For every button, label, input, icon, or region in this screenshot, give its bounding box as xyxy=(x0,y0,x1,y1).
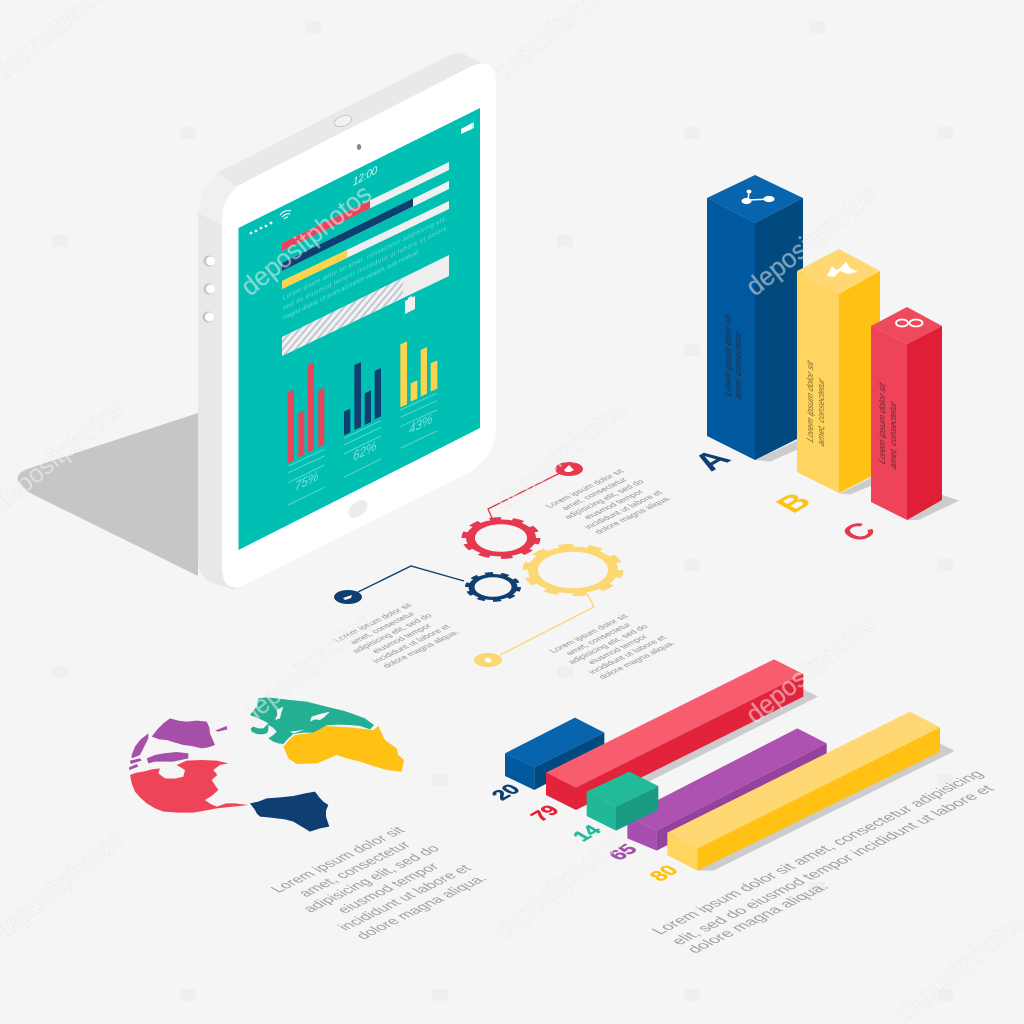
screen paragraph: Lorem ipsum dolor sit amet, consectetur adipisicing elit, xyxy=(283,215,447,302)
gear text: top right: eiusmod tempor xyxy=(581,488,646,520)
red chart xyxy=(288,362,324,463)
icon: network xyxy=(742,190,774,204)
column shadows xyxy=(755,439,959,520)
gear text: left: eiusmod tempor xyxy=(369,622,434,654)
wifi icon xyxy=(280,210,291,219)
column B text xyxy=(805,358,826,448)
clock: 12:00 xyxy=(353,164,378,189)
watermarks: depositphotos xyxy=(491,395,632,517)
gear text: top right: dolore magna aliqua. xyxy=(592,495,674,535)
bar chart text: elit, sed do eiusmod tempor incididunt ut labore et xyxy=(668,783,999,947)
chart percentages: 62% xyxy=(353,438,376,464)
watermarks: depositphotos xyxy=(236,180,377,302)
bar shadows xyxy=(627,689,955,871)
icon: gears xyxy=(896,320,922,326)
loading bar xyxy=(282,255,449,356)
tablet left edge xyxy=(198,213,236,590)
gear text: bottom right: incididunt ut labore et xyxy=(586,634,669,675)
chart percentages: 43% xyxy=(409,411,432,437)
map text: incididunt ut labore et xyxy=(335,863,476,933)
label A: A xyxy=(685,445,739,476)
gear text: bottom right: dolore magna aliqua. xyxy=(596,640,678,680)
column chart xyxy=(685,175,959,546)
yellow chart xyxy=(400,341,437,407)
yellow gear xyxy=(526,546,620,594)
gear text: bottom right: eiusmod tempor xyxy=(585,633,650,665)
progress bars xyxy=(282,162,449,289)
screen paragraph: magna aliqua. Ut enim ad minim veniam, quis nostrud xyxy=(283,249,418,322)
column A text xyxy=(723,312,743,401)
map text: eiusmod tempor xyxy=(334,861,443,916)
home button xyxy=(345,497,371,521)
gear text: bottom right: Lorem ipsum dolor sit xyxy=(547,613,631,654)
horizontal bar chart xyxy=(487,659,955,884)
gear text: top right: Lorem ipsum dolor sit xyxy=(543,468,627,509)
yellow node xyxy=(474,653,502,667)
bar: 20 xyxy=(505,718,604,790)
value 79: 79 xyxy=(526,802,565,824)
status bar dots xyxy=(250,222,272,234)
column B text: amet, consectetur xyxy=(816,375,826,448)
map: Europe Asia xyxy=(250,697,374,744)
map: Europe Asia gaps xyxy=(275,707,330,733)
map text: adipisicing elit, sed do xyxy=(300,843,444,915)
watermarks: depositphotos xyxy=(741,180,882,302)
column B text: Lorem ipsum dolor sit xyxy=(805,358,815,444)
value 65: 65 xyxy=(604,841,643,863)
map text: Lorem ipsum dolor sit xyxy=(268,825,410,895)
column C text xyxy=(877,380,898,471)
battery icon xyxy=(461,122,474,134)
gear text: left: incididunt ut labore et xyxy=(370,623,453,664)
yellow connector xyxy=(500,595,594,655)
value 14: 14 xyxy=(568,822,607,844)
tablet shadow xyxy=(18,413,198,576)
screen paragraph: sed do eiusmod tempor incididunt ut labore et dolore xyxy=(283,225,447,312)
gear text: left: adipisicing elit, sed do xyxy=(349,612,434,654)
tablet front face xyxy=(222,63,496,587)
map: Africa xyxy=(283,726,404,772)
gear text: bottom right: adipisicing elit, sed do xyxy=(565,623,650,665)
chart caption lines xyxy=(288,393,437,505)
screen bar charts xyxy=(288,341,437,505)
watermarks: depositphotos xyxy=(236,608,377,730)
chart percentages: 75% xyxy=(295,468,318,494)
gear text: left: Lorem ipsum dolor sit xyxy=(331,602,415,643)
tablet top edge xyxy=(217,54,492,186)
map: South America xyxy=(250,792,329,832)
gear text: top right: adipisicing elit, sed do xyxy=(561,478,646,520)
chart percentages xyxy=(295,411,432,494)
navy chart xyxy=(344,362,381,435)
red gear xyxy=(465,519,537,557)
watermarks: depositphotos xyxy=(489,825,630,947)
gear text: top right: amet, consectetur xyxy=(559,476,630,511)
world map xyxy=(129,697,404,832)
gear text: left: dolore magna aliqua. xyxy=(380,629,462,669)
camera xyxy=(357,144,361,150)
label C: C xyxy=(833,517,884,546)
column C xyxy=(871,307,942,520)
column A text: Lorem ipsum dolor sit xyxy=(723,312,733,398)
value 20: 20 xyxy=(487,781,526,803)
map: Arctic xyxy=(129,718,227,770)
red node xyxy=(555,462,583,476)
bar: 80 xyxy=(667,712,940,871)
tablet bevel corner xyxy=(198,173,235,225)
bar: 79 xyxy=(546,659,803,810)
tablet side buttons xyxy=(202,256,215,322)
column B xyxy=(797,249,880,493)
tablet top button xyxy=(333,113,353,129)
column C text: amet, consectetur xyxy=(888,398,898,471)
icon: people xyxy=(827,262,858,277)
bar chart text: dolore magna aliqua. xyxy=(684,881,833,956)
screen xyxy=(238,108,480,550)
navy connector xyxy=(358,566,464,592)
bar: 14 xyxy=(587,772,658,831)
gear text: bottom right: amet, consectetur xyxy=(563,621,634,656)
clipboard icon xyxy=(405,296,415,314)
navy node xyxy=(334,590,362,604)
gear text: left: amet, consectetur xyxy=(347,610,418,645)
map text: amet, consectetur xyxy=(295,840,415,899)
column C text: Lorem ipsum dolor sit xyxy=(877,380,887,466)
column A xyxy=(707,175,803,460)
bar chart text: Lorem ipsum dolor sit amet, consectetur adipisicing xyxy=(649,769,988,937)
column A text: amet, consectetur xyxy=(733,328,743,401)
gear text: top right: incididunt ut labore et xyxy=(582,489,665,530)
map text: dolore magna aliqua. xyxy=(353,873,491,942)
label B: B xyxy=(768,488,819,517)
value 80: 80 xyxy=(645,862,684,884)
tablet xyxy=(198,54,496,590)
map: North America xyxy=(130,760,248,813)
navy gear xyxy=(468,573,518,601)
watermarks: depositphotos xyxy=(741,608,882,730)
gear diagram xyxy=(330,462,680,681)
bar: 65 xyxy=(627,728,827,851)
red connector xyxy=(488,473,560,518)
